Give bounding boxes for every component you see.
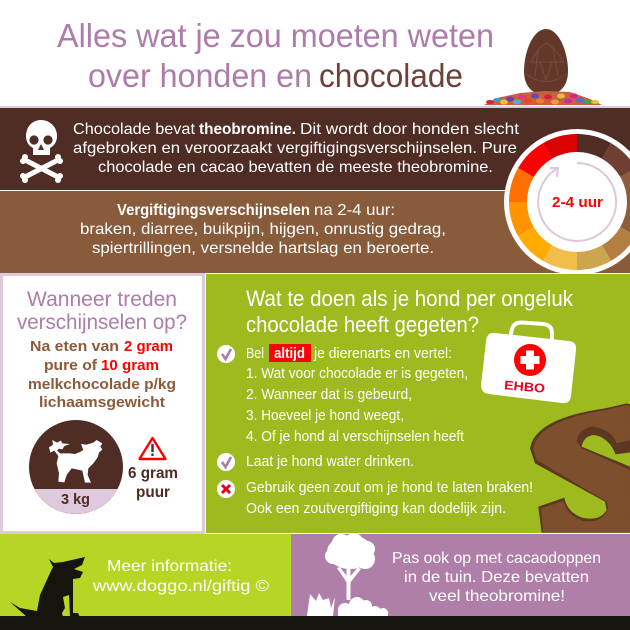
- text: theobromine explanation: afgebroken en veroorzaakt vergiftigingsverschijnselen. Pure: [73, 140, 517, 157]
- panel: when do symptoms occur: [0, 273, 205, 534]
- icon: first aid kit: EHBO: [504, 378, 546, 396]
- text: call vet: 4. Of je hond al verschijnselen heeft: [246, 428, 465, 445]
- icon: small dog 3 kg: [29, 420, 123, 514]
- text: call vet: altijd: [274, 345, 305, 362]
- text: dosage: [28, 338, 176, 411]
- text: cocoa shell warning: in de tuin. Deze bevatten: [404, 569, 589, 586]
- text: no salt: [246, 479, 533, 517]
- heading: verschijnselen op?: [17, 311, 187, 334]
- text: call vet: [246, 344, 468, 445]
- text: theobromine explanation: Dit wordt door honden slecht: [300, 121, 520, 138]
- text: cocoa shell warning: [392, 550, 601, 605]
- icon: warning triangle: [140, 438, 166, 459]
- panel: symptoms: [0, 191, 630, 273]
- text: 2-4 uur: 2-4 uur: [552, 194, 603, 211]
- text: give water: Laat je hond water drinken.: [246, 453, 414, 470]
- text: cocoa shell warning: veel theobromine!: [429, 588, 565, 605]
- text: dosage: 10 gram: [101, 357, 159, 374]
- panel: what to do: [206, 274, 630, 533]
- panel: more information: [0, 534, 291, 617]
- text: theobromine explanation: Chocolade bevat: [73, 121, 196, 138]
- heading: chocolade heeft gegeten?: [246, 312, 479, 337]
- text: call vet: Bel: [246, 345, 264, 362]
- heading: Wanneer treden: [27, 288, 177, 311]
- icon: black dog silhouette: [10, 557, 85, 617]
- text: dosage: 2 gram: [124, 338, 173, 355]
- arrow: circular clock arrow: [538, 163, 616, 241]
- icon: small dog 3 kg: 3 kg: [61, 491, 90, 508]
- divider band: [0, 106, 630, 108]
- image: chocolate egg on candy: [484, 29, 602, 105]
- panel: cocoa shells: [291, 533, 630, 618]
- heading: [17, 288, 187, 334]
- text: symptoms list: braken, diarree, buikpijn, hijgen, onrustig gedrag,: [80, 221, 446, 238]
- heading: [246, 286, 574, 337]
- text: dosage: pure of: [44, 357, 98, 374]
- text: call vet: 2. Wanneer dat is gebeurd,: [246, 386, 412, 403]
- text: no salt: Gebruik geen zout om je hond te laten braken!: [246, 479, 533, 496]
- text: theobromine explanation: [73, 121, 520, 176]
- text: 6 gram puur: puur: [136, 484, 170, 501]
- title: chocolade: [319, 57, 463, 94]
- text: more info: [92, 558, 269, 595]
- text: theobromine explanation: theobromine.: [199, 121, 296, 138]
- text: theobromine explanation: chocolade en cacao bevatten de meeste theobromine.: [98, 159, 493, 176]
- text: more info: www.doggo.nl/giftig ©: [92, 578, 269, 595]
- text: no salt: Ook een zoutvergiftiging kan dodelijk zijn.: [246, 500, 506, 517]
- text: call vet: je dierenarts en vertel:: [313, 345, 452, 362]
- text: dosage: Na eten van: [30, 338, 119, 355]
- icon: check 2: [217, 453, 235, 471]
- text: call vet: 1. Wat voor chocolade er is gegeten,: [246, 365, 468, 382]
- icon: first aid kit: [481, 322, 576, 403]
- icon: cross: [217, 480, 235, 498]
- text: cocoa shell warning: Pas ook op met cacaodoppen: [392, 550, 601, 567]
- icon: tree silhouette: [307, 533, 388, 618]
- text: symptoms list: spiertrillingen, versnelde hartslag en beroerte.: [92, 240, 434, 257]
- text: call vet: 3. Hoeveel je hond weegt,: [246, 407, 404, 424]
- icon: skull and crossbones: [20, 120, 63, 183]
- text: symptoms list: [80, 202, 446, 257]
- text: 6 gram puur: 6 gram: [128, 465, 178, 482]
- chart: 2-4 hour clock wheel: [501, 126, 630, 278]
- text: dosage: lichaamsgewicht: [39, 394, 165, 411]
- footer band: [0, 616, 630, 630]
- text: symptoms list: Vergiftigingsverschijnselen: [117, 202, 310, 219]
- heading: Wat te doen als je hond per ongeluk: [246, 286, 574, 311]
- panel: theobromine warning: [0, 108, 630, 190]
- title: Alles wat je zou moeten weten: [57, 17, 494, 54]
- image: chocolate letter S: [530, 403, 630, 533]
- icon: check 1: [217, 345, 235, 363]
- text: more info: Meer informatie:: [107, 558, 232, 575]
- text: 6 gram puur: [128, 465, 178, 501]
- text: dosage: melkchocolade p/kg: [28, 376, 176, 393]
- text: symptoms list: na 2-4 uur:: [314, 202, 395, 219]
- title: over honden en: [88, 57, 312, 94]
- title: [57, 17, 494, 94]
